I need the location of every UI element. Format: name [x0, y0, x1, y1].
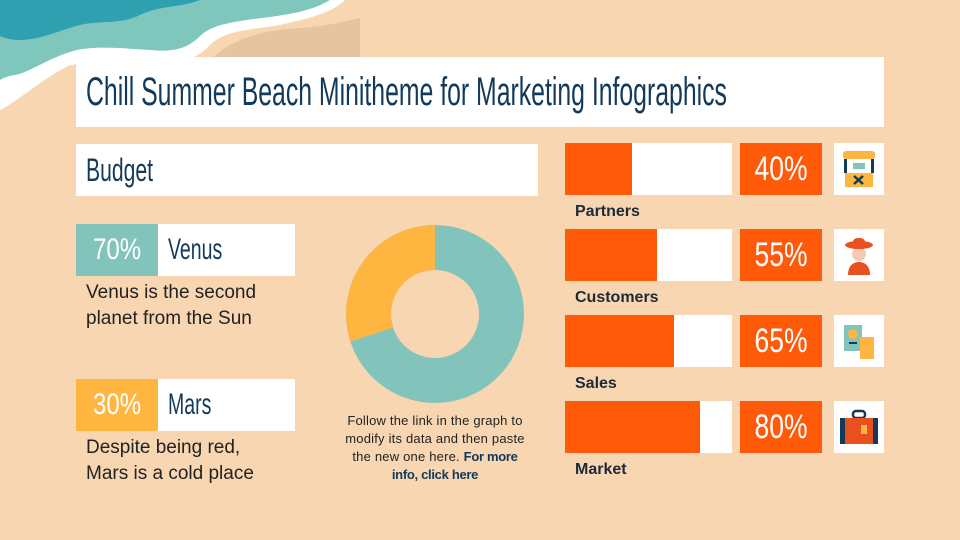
row: partners: [565, 143, 884, 220]
donut chart: [346, 225, 524, 403]
heading: budget: Budget: [86, 152, 153, 188]
title: [76, 57, 884, 127]
chart caption: Follow the link in the graph to modify its data and then paste the new one here. For more info, click here: [345, 413, 525, 482]
venus name: [158, 224, 295, 276]
row: market: [565, 401, 884, 478]
mars name: Mars: [168, 388, 211, 421]
row: market: 80%: [754, 408, 808, 446]
panel: venus: [76, 224, 295, 329]
icon: woman with hat: [834, 229, 884, 281]
icon: suitcase: [834, 401, 884, 453]
icon: market stall: [834, 143, 884, 195]
mars percent: [76, 379, 158, 431]
row: customers: Customers: [575, 289, 659, 306]
row: partners: 40%: [754, 150, 808, 188]
row: customers: 55%: [754, 236, 808, 274]
row: partners: Partners: [575, 203, 640, 220]
heading: budget: [76, 144, 538, 196]
row: sales: 65%: [754, 322, 808, 360]
row: sales: Sales: [575, 375, 617, 392]
mars name: [158, 379, 295, 431]
row: sales: [565, 315, 884, 392]
venus percent: 70%: [93, 233, 141, 266]
row: market: Market: [575, 461, 627, 478]
venus percent: [76, 224, 158, 276]
panel: mars: [76, 379, 295, 484]
icon: documents: [834, 315, 884, 367]
mars text: Despite being red, Mars is a cold place: [86, 437, 254, 484]
title: Chill Summer Beach Minitheme for Marketing Infographics: [86, 70, 727, 114]
venus text: Venus is the second planet from the Sun: [86, 282, 256, 329]
mars percent: 30%: [93, 388, 141, 421]
venus name: Venus: [168, 233, 222, 266]
decoration: sea waves: [0, 0, 360, 110]
row: customers: [565, 229, 884, 306]
